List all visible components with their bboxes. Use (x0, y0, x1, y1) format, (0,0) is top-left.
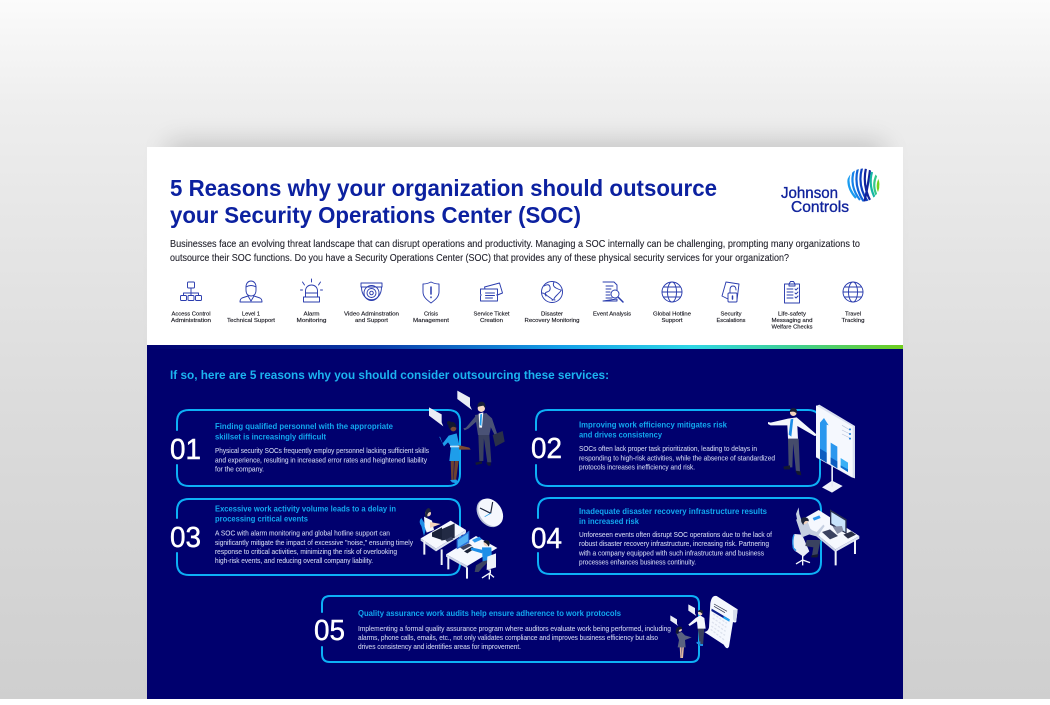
panel: reason 03: high-risk events, and reducing overall company liability. (215, 556, 373, 565)
label: disaster recovery (524, 312, 580, 324)
panel: reason 01: skillset is increasingly difficult (215, 432, 326, 442)
panel: reason 01: Finding qualified personnel with the appropriate (215, 421, 393, 431)
logo: Johnson Controls: Johnson (781, 185, 838, 202)
card shadow (168, 142, 884, 699)
label: life-safety: Messaging and (772, 318, 812, 324)
label: access control (171, 312, 211, 324)
panel: reason 04: robust disaster recovery infrastructure, increasing risk. Partnering (579, 539, 769, 548)
panel: reason 01 (170, 410, 460, 486)
illustration: two colleagues talking (429, 391, 505, 484)
panel: reason 02: 02 (531, 433, 562, 465)
intro text (170, 239, 860, 264)
intro text: outsource their SOC functions. Do you have a Security Operations Center (SOC) that provides any of these physical security services for your organization? (170, 253, 789, 264)
label: access control: Administration (171, 318, 211, 324)
label: travel tracking: Travel (845, 312, 861, 318)
panel: reason 03: processing critical events (215, 514, 308, 524)
icon: event analysis (603, 282, 623, 302)
label: life-safety (772, 312, 813, 330)
illustration: auditors with report scroll (670, 596, 738, 658)
icon: alarm (300, 279, 322, 302)
label: video administration: Video Adminstration (344, 312, 399, 318)
label: service ticket (474, 312, 510, 324)
label: event analysis: Event Analysis (593, 312, 631, 318)
label: travel tracking (842, 312, 864, 324)
icon: security escalations (722, 282, 739, 302)
label: crisis management (413, 312, 449, 324)
panel: reason 02: protocols increases inefficiency and risk. (579, 462, 695, 472)
intro text: Businesses face an evolving threat landscape that can disrupt operations and productivity. Managing a SOC internally can be challenging, prompting many organizations to (170, 239, 860, 250)
title: 5 Reasons why your organization should outsource (170, 175, 717, 201)
panel: reason 05: Implementing a formal quality assurance program where auditors evaluate work being performed, including (358, 624, 671, 633)
panel: reason 04: with a company equipped with such infrastructure and business (578, 548, 764, 558)
icon: video camera (361, 283, 382, 300)
label: access control: Access Control (172, 312, 210, 318)
title: your Security Operations Center (SOC) (170, 202, 581, 228)
label: technical support: Level 1 (242, 312, 260, 318)
panel: reason 03: response to critical activities, minimizing the risk of overlooking (215, 547, 397, 556)
panel: reason 04: processes enhances business continuity. (579, 558, 696, 566)
label: crisis management: Crisis (424, 312, 438, 318)
icon: technical support (240, 281, 262, 302)
illustration: presenter with chart board (768, 405, 855, 493)
illustration: person at workstation (792, 507, 859, 565)
icon: service ticket (480, 283, 502, 301)
label: security escalations: Security (720, 312, 742, 318)
icon: crisis shield (423, 282, 439, 303)
panel: reason 03: Excessive work activity volume leads to a delay in (215, 504, 396, 514)
label: service ticket: Creation (480, 318, 503, 324)
logo: Johnson Controls (781, 168, 881, 216)
panel: reason 01: 01 (170, 434, 201, 466)
label: alarm monitoring (296, 312, 326, 324)
label: travel tracking: Tracking (842, 318, 864, 324)
label: service ticket: Service Ticket (474, 312, 510, 318)
panel: reason 05: drives consistency and identifies areas for improvement. (358, 642, 521, 651)
panel: reason 02: SOCs often lack proper task prioritization, leading to delays in (579, 444, 757, 453)
title (170, 175, 717, 228)
logo: Johnson Controls: Controls (791, 199, 849, 216)
panel: reason 04: in increased risk (579, 516, 639, 526)
label: security escalations (716, 312, 746, 324)
icon: global hotline (662, 282, 682, 302)
panel: reason 01: Physical security SOCs frequently employ personnel lacking sufficient skills (215, 446, 429, 455)
panel: reason 03: A SOC with alarm monitoring and global hotline support can (215, 529, 390, 538)
panel: reason 01: and experience, resulting in increased error rates and heightened liability (215, 456, 427, 464)
panel: reason 02: responding to high-risk activities, while the absence of standardized (579, 454, 775, 462)
label: video administration: and Support (355, 318, 388, 324)
label: technical support (227, 312, 275, 324)
panel: reason 01: for the company. (215, 464, 264, 474)
panel: reason 04 (531, 498, 821, 574)
label: video administration (344, 312, 399, 324)
panel: reason 05 (314, 596, 699, 662)
label: global hotline (653, 312, 691, 324)
label: alarm monitoring: Monitoring (296, 318, 326, 324)
panel: reason 04: 04 (531, 523, 562, 555)
panel: reason 02: Improving work efficiency mitigates risk (579, 420, 727, 430)
panel: reason 03: 03 (170, 522, 201, 554)
label: alarm monitoring: Alarm (304, 312, 320, 318)
label: global hotline: Global Hotline (653, 312, 691, 318)
panel: reason 02 (531, 410, 820, 486)
icon: life-safety checklist (784, 282, 800, 303)
illustration: operators at desks with clock (420, 494, 508, 579)
section heading: If so, here are 5 reasons why you should consider outsourcing these services: (170, 368, 609, 382)
label: disaster recovery: Disaster (541, 312, 563, 318)
icon: disaster globe (542, 282, 562, 302)
panel: reason 04: Unforeseen events often disrupt SOC operations due to the lack of (579, 530, 773, 539)
panel: reason 03: significantly mitigate the impact of excessive "noise," ensuring timely (215, 538, 413, 547)
bottom strip (0, 699, 1050, 705)
panel: reason 05: alarms, phone calls, emails, etc., not only validates compliance and improves business efficiency but also (358, 633, 658, 642)
panel: reason 02: and drives consistency (579, 430, 662, 440)
panel: reason 04: Inadequate disaster recovery infrastructure results (579, 506, 767, 516)
icon: access control (180, 282, 202, 300)
label: life-safety: Life-safety (778, 312, 806, 318)
panel: navy body (147, 346, 903, 699)
label: technical support: Technical Support (227, 318, 275, 324)
panel: white header (147, 147, 903, 346)
panel: reason 03 (170, 499, 460, 575)
label: life-safety: Welfare Checks (772, 324, 813, 330)
label: security escalations: Escalations (716, 318, 746, 324)
label: disaster recovery: Recovery Monitoring (524, 318, 580, 324)
label: global hotline: Support (662, 318, 683, 324)
icon: travel tracking (843, 282, 863, 302)
gradient divider bar (147, 345, 903, 349)
icon row: physical security services (171, 279, 864, 330)
label: crisis management: Management (413, 318, 449, 324)
panel: reason 05: Quality assurance work audits help ensure adherence to work protocols (358, 608, 621, 618)
panel: reason 05: 05 (314, 615, 345, 647)
